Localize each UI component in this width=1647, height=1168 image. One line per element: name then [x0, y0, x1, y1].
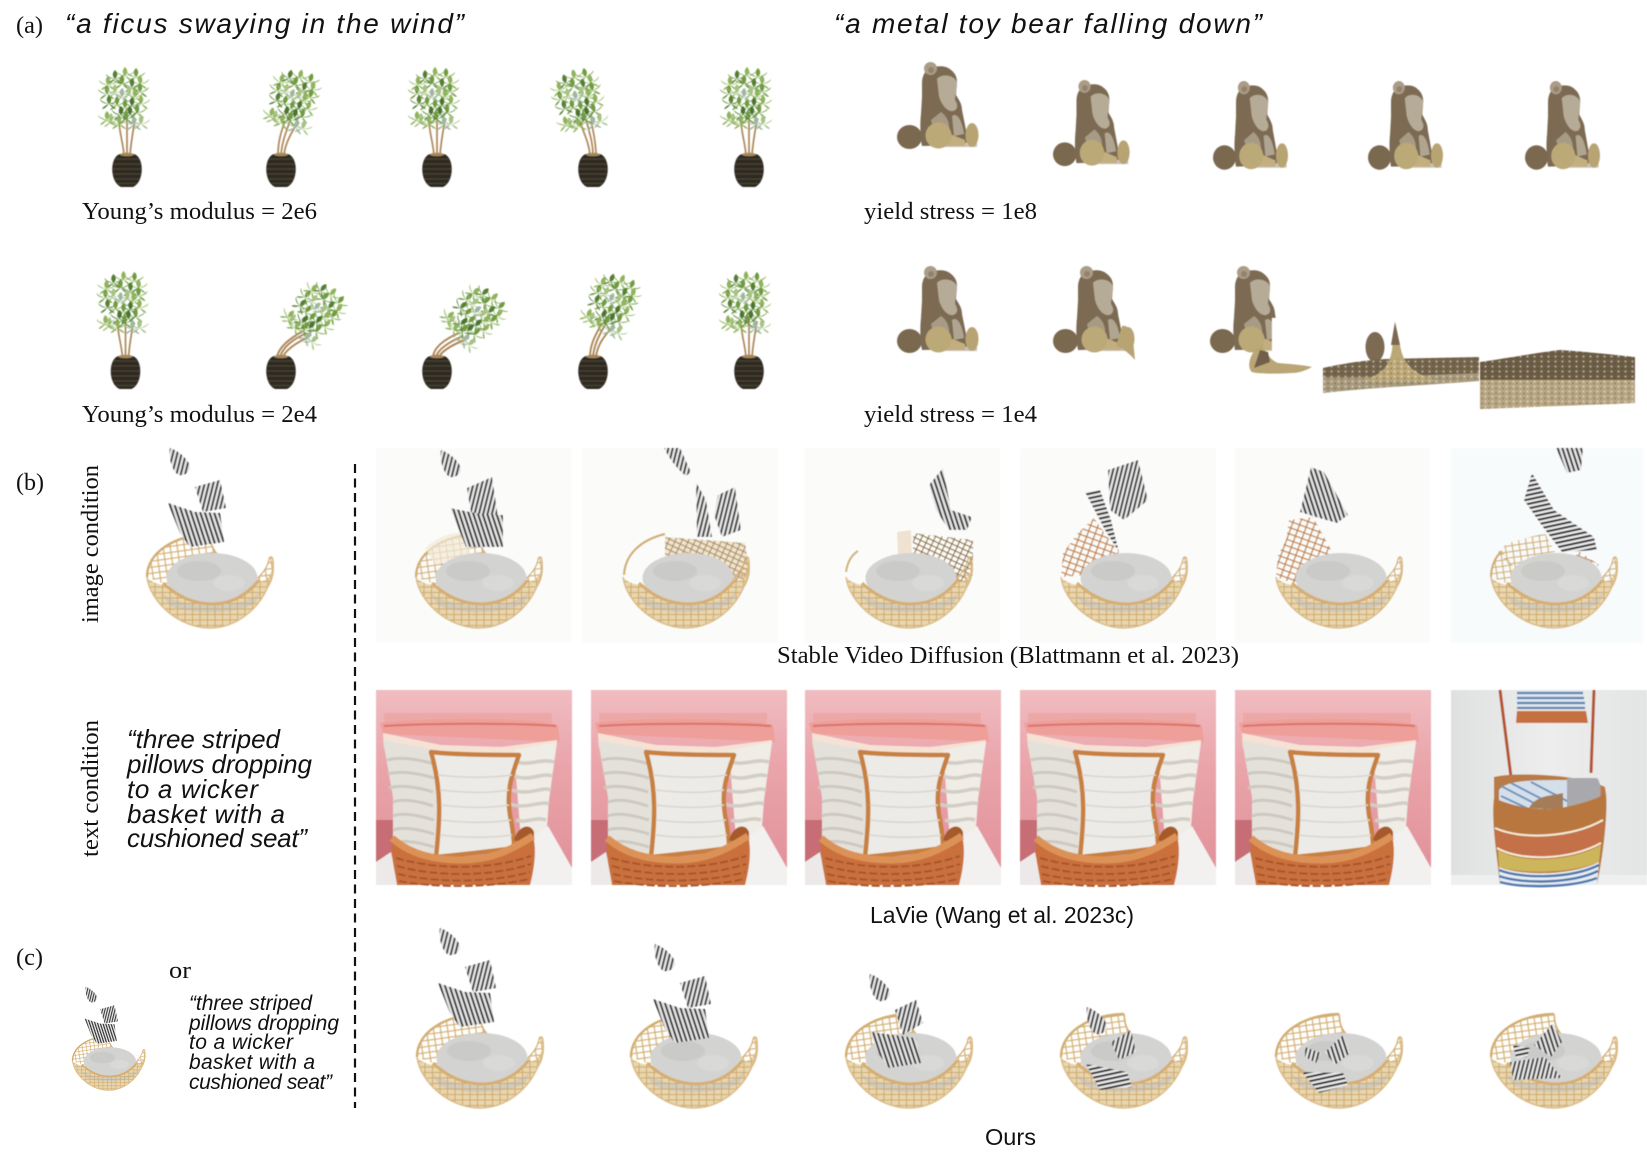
SVD frame 1 — [376, 448, 571, 642]
SVD frame 5 — [1235, 448, 1430, 643]
SVD frame 6 — [1451, 448, 1643, 643]
bear frame 1 — [897, 266, 978, 353]
ficus frame 4 — [575, 265, 647, 389]
bear frame 3 — [1213, 81, 1288, 170]
rotated label: image condition: image condition — [78, 465, 104, 623]
ficus frame 1 — [98, 67, 150, 187]
LaVie row — [376, 690, 1647, 886]
bear row, yield stress 1e4 — [897, 266, 1635, 409]
Ours frame 5 — [1276, 1014, 1402, 1108]
bear frame 2 — [1053, 80, 1130, 166]
ficus frame 1 — [96, 271, 148, 389]
small prompt text — [188, 992, 339, 1094]
small prompt text: to a wicker — [189, 1031, 294, 1054]
text condition prompt: to a wicker — [127, 774, 259, 804]
label: yield stress 1e8: yield stress = 1e8 — [864, 199, 1037, 225]
ficus frame 4 — [546, 64, 610, 187]
Ours frame 6 — [1491, 1014, 1617, 1108]
ficus row, Young's modulus 2e4 — [96, 265, 771, 389]
rotated label: text condition: text condition — [78, 720, 104, 857]
panel label (c): (c) — [16, 945, 43, 971]
LaVie frame 2 — [591, 690, 787, 886]
LaVie frame 3 — [805, 690, 1001, 886]
text condition prompt — [126, 724, 313, 853]
small prompt text: pillows dropping — [188, 1012, 339, 1035]
label: Young's modulus 2e4: Young’s modulus = 2e4 — [82, 402, 317, 428]
small prompt text: cushioned seat” — [189, 1071, 333, 1094]
SVD frame 4 — [1020, 448, 1216, 643]
prompt heading: bear: “a metal toy bear falling down” — [834, 8, 1264, 39]
bear frame 4 — [1368, 81, 1443, 170]
panel label (b): (b) — [16, 470, 44, 496]
SVD frame 2 — [582, 448, 778, 643]
bear frame 1 — [897, 62, 978, 149]
LaVie frame 1 — [376, 690, 572, 886]
ficus frame 3 — [408, 67, 460, 187]
text condition prompt: cushioned seat” — [127, 823, 308, 853]
caption: Stable Video Diffusion: Stable Video Diffusion (Blattmann et al. 2023) — [777, 643, 1239, 669]
caption: LaVie: LaVie (Wang et al. 2023c) — [870, 902, 1134, 928]
Stable Video Diffusion row — [376, 448, 1643, 643]
LaVie frame 6: hanging striped basket — [1451, 690, 1647, 886]
ficus row, Young's modulus 2e6 — [98, 62, 772, 187]
dashed divider — [354, 464, 356, 1108]
bear frame 2 with melting foot — [1053, 266, 1135, 360]
Ours frame 1 — [417, 928, 543, 1108]
bear frame 3 collapsing — [1210, 266, 1312, 374]
or: or — [169, 958, 191, 984]
ficus frame 2 — [259, 62, 326, 187]
small prompt text: basket with a — [189, 1051, 315, 1074]
caption: Ours: Ours — [985, 1124, 1036, 1150]
text condition prompt: pillows dropping — [126, 749, 313, 779]
panel label (a): (a) — [16, 13, 43, 39]
LaVie frame 5 — [1235, 690, 1431, 886]
bear frame 5 fully melted — [1480, 350, 1635, 409]
Ours frame 3 — [846, 974, 972, 1108]
text condition prompt: “three striped — [127, 724, 282, 754]
small input basket and pillows — [72, 987, 145, 1090]
LaVie frame 4 — [1020, 690, 1216, 886]
bear frame 4 melted — [1323, 322, 1479, 393]
ficus frame 3 — [422, 274, 515, 389]
Ours frame 4 — [1061, 1007, 1187, 1108]
label: Young's modulus 2e6: Young’s modulus = 2e6 — [82, 199, 317, 225]
SVD frame 3 — [805, 448, 1000, 643]
Ours frame 2 — [631, 944, 757, 1108]
Ours row — [417, 928, 1617, 1108]
text condition prompt: basket with a — [127, 799, 285, 829]
ficus frame 5 — [720, 67, 772, 187]
small prompt text: “three striped — [189, 992, 313, 1015]
ficus frame 2 — [266, 271, 355, 389]
ficus frame 5 — [719, 271, 771, 389]
bear row, yield stress 1e8 — [897, 62, 1600, 170]
image condition: input basket and pillows — [147, 448, 273, 628]
bear frame 5 — [1525, 81, 1600, 170]
prompt heading: ficus: “a ficus swaying in the wind” — [65, 8, 466, 39]
label: yield stress 1e4: yield stress = 1e4 — [864, 402, 1037, 428]
